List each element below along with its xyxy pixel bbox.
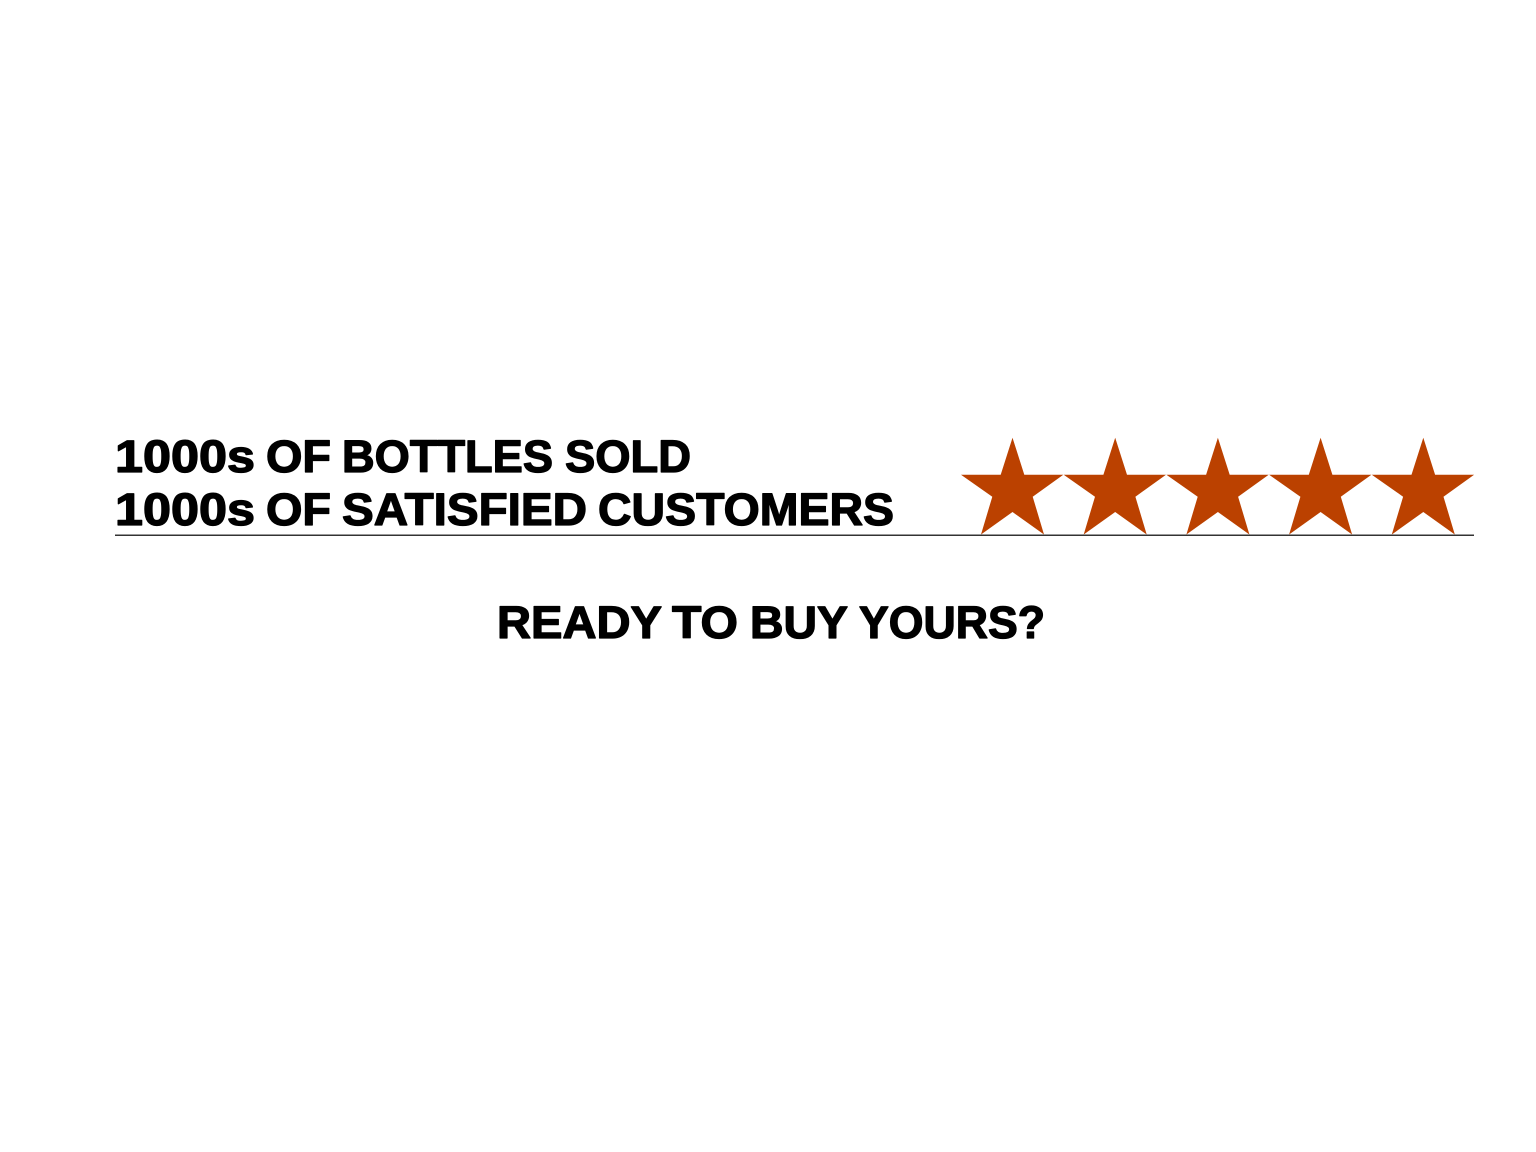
- call to action: TO: [672, 597, 738, 648]
- call to action: BUY: [750, 597, 848, 648]
- call to action: READY: [497, 597, 662, 648]
- call to action: YOURS?: [859, 597, 1045, 648]
- divider line: [115, 534, 1474, 536]
- heading: bottles sold and satisfied customers: 1000s: [115, 484, 255, 535]
- heading: bottles sold and satisfied customers: CUSTOMERS: [598, 484, 894, 535]
- heading: bottles sold and satisfied customers: SATISFIED: [342, 484, 587, 535]
- heading: bottles sold and satisfied customers: [115, 431, 894, 535]
- heading: bottles sold and satisfied customers: SOLD: [565, 431, 691, 482]
- five star rating: [961, 438, 1474, 534]
- heading: bottles sold and satisfied customers: OF: [266, 431, 331, 482]
- heading: bottles sold and satisfied customers: BOTTLES: [342, 431, 553, 482]
- heading: bottles sold and satisfied customers: 1000s: [115, 431, 255, 482]
- call to action: [497, 597, 1045, 648]
- heading: bottles sold and satisfied customers: OF: [266, 484, 331, 535]
